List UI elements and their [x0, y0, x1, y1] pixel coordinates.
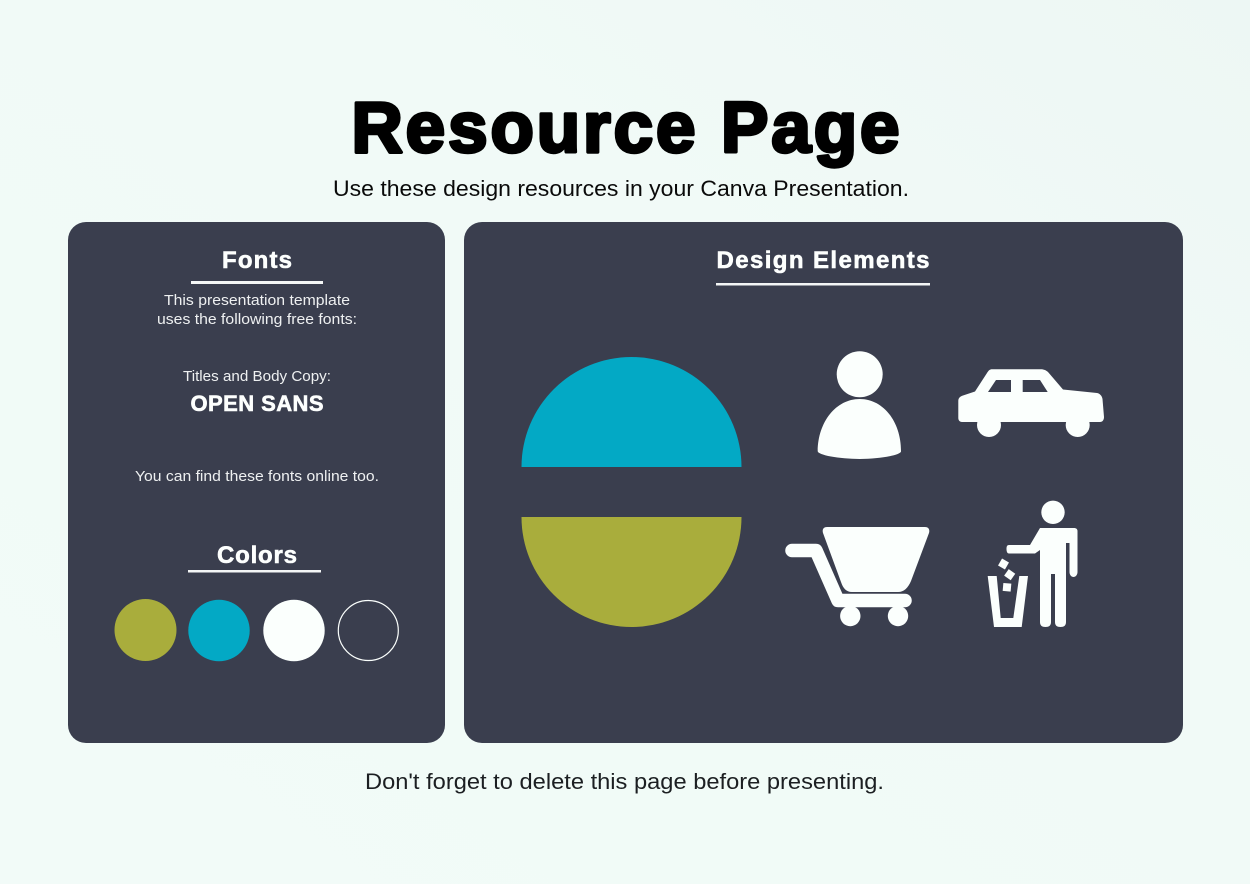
- panel: design elements: [464, 222, 1183, 743]
- icon: person throwing trash: [988, 501, 1078, 627]
- text: fonts online note: You can find these fonts online too.: [135, 469, 379, 485]
- color swatches: [114, 599, 398, 661]
- text: template intro: [157, 293, 357, 328]
- text: titles and body copy label: Titles and Body Copy:: [183, 369, 331, 385]
- icon: car: [958, 369, 1104, 437]
- text: font name: OPEN SANS: [190, 391, 324, 416]
- heading: colors: Colors: [217, 542, 297, 569]
- icon: person: [818, 351, 901, 459]
- panel: fonts and colors: [68, 222, 445, 743]
- heading: design elements: Design Elements: [716, 247, 930, 274]
- footer note: Don't forget to delete this page before presenting.: [365, 769, 884, 794]
- text: template intro: uses the following free fonts:: [157, 312, 357, 328]
- text: template intro: This presentation template: [164, 293, 350, 309]
- icon: shopping cart: [792, 527, 929, 626]
- heading: fonts: Fonts: [222, 247, 292, 274]
- title: Resource Page: [352, 89, 900, 168]
- subtitle: Use these design resources in your Canva Presentation.: [333, 176, 909, 201]
- teal half circle: [522, 357, 742, 467]
- olive half circle: [522, 517, 742, 627]
